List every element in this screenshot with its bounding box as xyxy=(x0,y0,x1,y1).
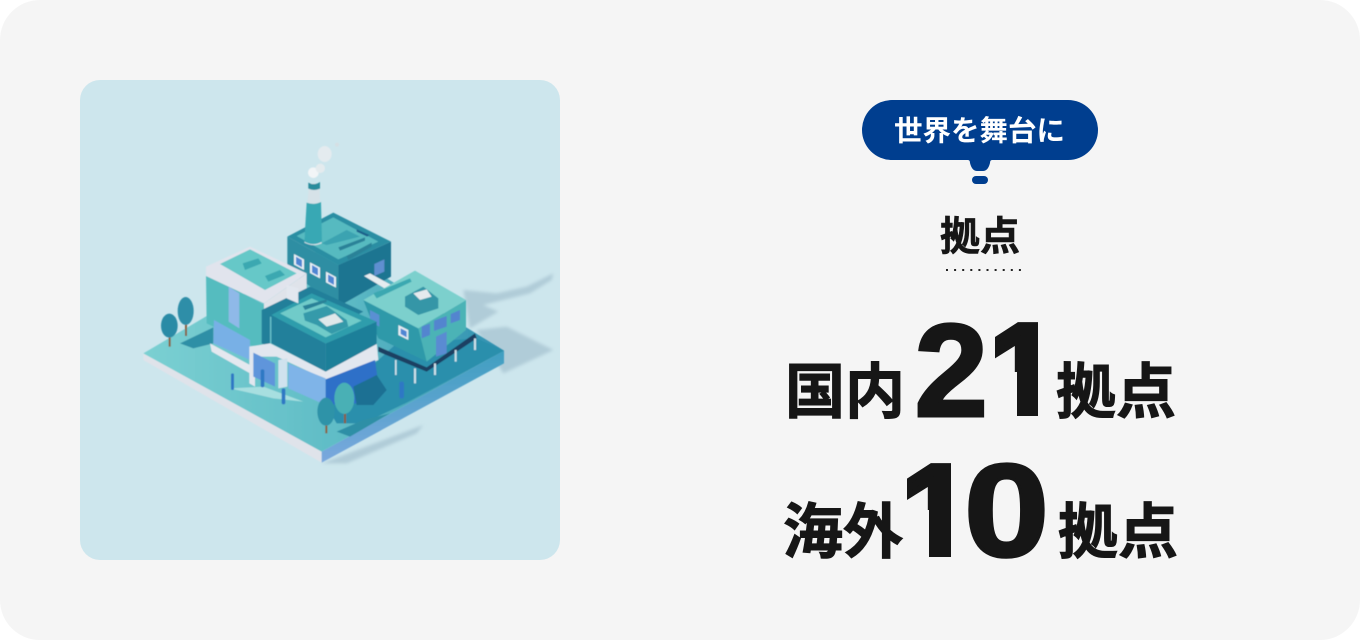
chimney with smoke xyxy=(304,143,339,245)
heading: 拠点 xyxy=(940,215,1020,259)
tag: speech bubble xyxy=(862,100,1098,184)
back building xyxy=(287,213,391,307)
stat: domestic 21: 拠点 xyxy=(1056,359,1176,426)
stat: overseas 10: 1 xyxy=(900,438,973,585)
stat: overseas 10: 拠点 xyxy=(1058,499,1178,566)
left building xyxy=(206,247,363,373)
tag text: 世界を舞台に xyxy=(894,116,1065,148)
panel: illustration background xyxy=(80,80,560,560)
right building xyxy=(363,271,477,383)
connecting pipe xyxy=(364,273,407,301)
stat: overseas 10 xyxy=(784,462,1177,560)
base platform xyxy=(143,243,504,463)
dotted underline xyxy=(946,269,1022,271)
stat: domestic 21: 1 xyxy=(987,297,1060,444)
ground shadows xyxy=(322,273,553,463)
front building xyxy=(249,285,387,405)
stat: domestic 21: 国内 xyxy=(785,359,905,426)
trees xyxy=(161,297,354,433)
illustration: isometric factory xyxy=(143,143,553,463)
stat: overseas 10: 海外 xyxy=(783,499,903,566)
stat: overseas 10: 0 xyxy=(964,438,1049,585)
stat: domestic 21: 2 xyxy=(914,297,988,444)
people xyxy=(231,369,404,404)
stat: domestic 21 xyxy=(789,322,1175,420)
